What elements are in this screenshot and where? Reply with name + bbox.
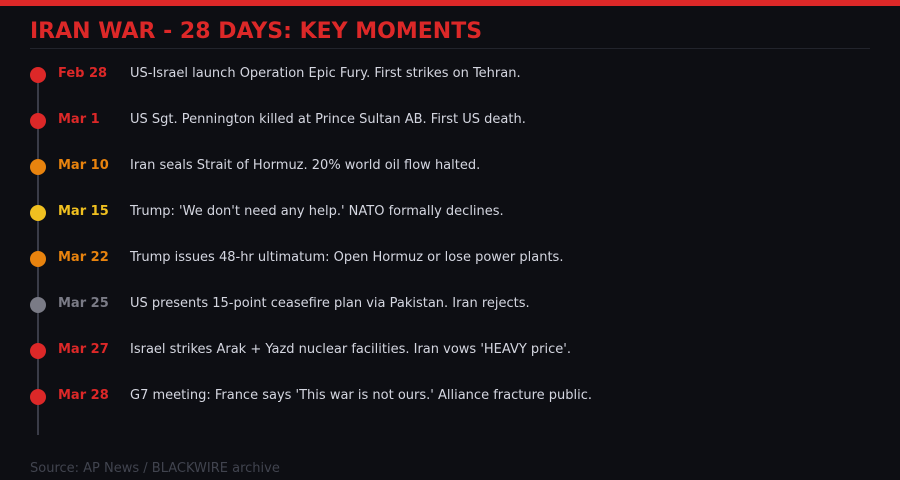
- event: Feb 28: US-Israel launch Operation Epic Fury. First strikes on Tehran.: [130, 66, 521, 81]
- event: Mar 15: Mar 15: [58, 204, 109, 219]
- event: Mar 25: Mar 25: [58, 296, 109, 311]
- event: Mar 10: [30, 158, 480, 175]
- source: Source: AP News / BLACKWIRE archive: [30, 461, 280, 476]
- event: Mar 28: Mar 28: [58, 388, 109, 403]
- event: Mar 15: [30, 204, 504, 221]
- event: Mar 10: Mar 10: [58, 158, 109, 173]
- event: Mar 22: Trump issues 48-hr ultimatum: Open Hormuz or lose power plants.: [130, 250, 563, 265]
- event: Mar 10: Iran seals Strait of Hormuz. 20% world oil flow halted.: [130, 158, 480, 173]
- event: Feb 28: Feb 28: [58, 66, 107, 81]
- event: Mar 1: Mar 1: [58, 112, 100, 127]
- event: Mar 27: Mar 27: [58, 342, 109, 357]
- event: Mar 1: US Sgt. Pennington killed at Prince Sultan AB. First US death.: [130, 112, 526, 127]
- event: Mar 28: G7 meeting: France says 'This war is not ours.' Alliance fracture public.: [130, 388, 592, 403]
- timeline line: [37, 74, 39, 435]
- event: Mar 22: Mar 22: [58, 250, 109, 265]
- event: Mar 15: Trump: 'We don't need any help.' NATO formally declines.: [130, 204, 504, 219]
- event: Mar 25: US presents 15-point ceasefire plan via Pakistan. Iran rejects.: [130, 296, 530, 311]
- title: IRAN WAR - 28 DAYS: KEY MOMENTS: [30, 19, 482, 44]
- event: Mar 27: Israel strikes Arak + Yazd nuclear facilities. Iran vows 'HEAVY price'.: [130, 342, 571, 357]
